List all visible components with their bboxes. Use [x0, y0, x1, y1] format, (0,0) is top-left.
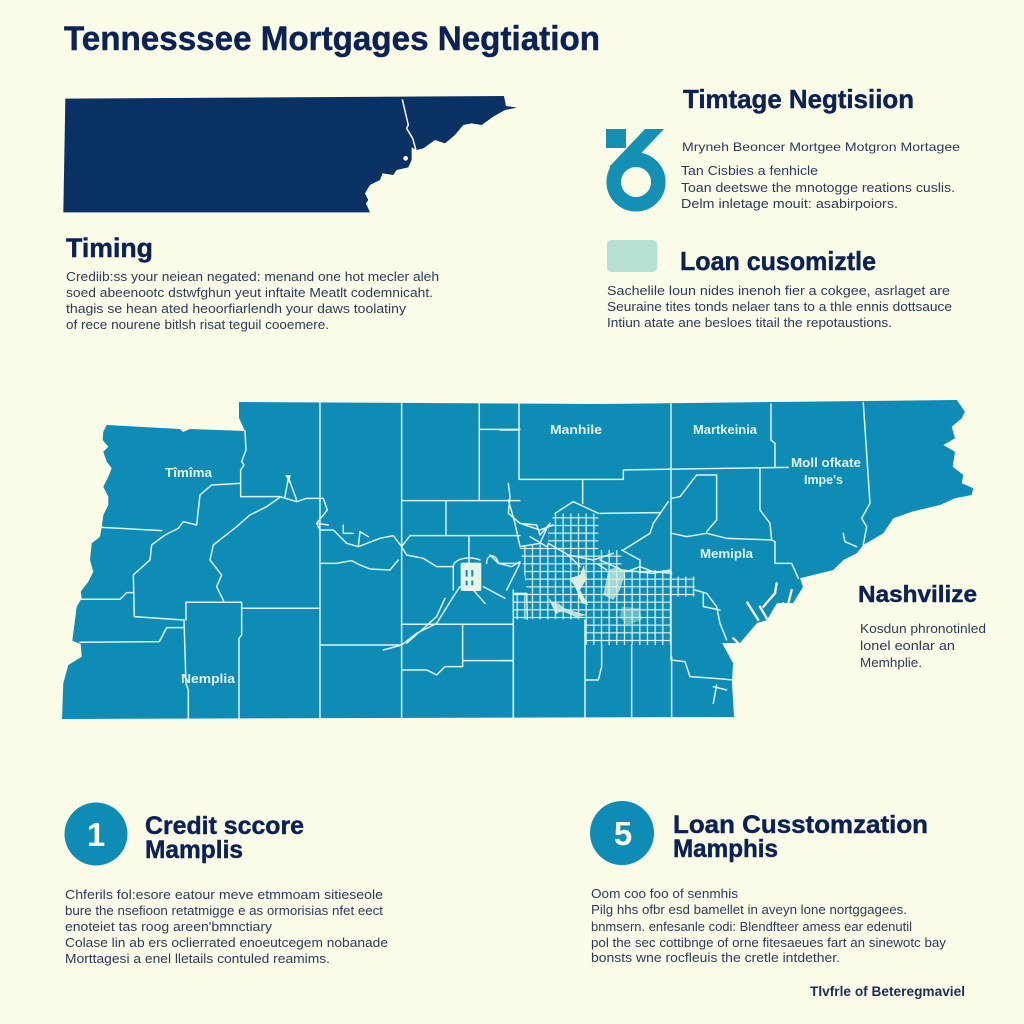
pale lakes: [552, 565, 642, 625]
text block: credit score: bure the nsefioon retatmigge e as ormorisias nfet eect: [65, 903, 383, 918]
badge: number one: 1: [87, 816, 105, 853]
county lines: east: [500, 403, 870, 718]
text block: loan customization: [591, 886, 947, 965]
panel: nashvilize: [858, 581, 986, 670]
text block: timing: [66, 269, 439, 332]
panel: timing: [66, 233, 439, 332]
text block: nashvilize: Memhplie.: [860, 655, 922, 670]
panel: loan customization mamphis: [590, 801, 947, 965]
text block: timing: Crediib:ss your neiean negated: menand one hot mecler aleh: [66, 269, 439, 284]
map shape: [62, 400, 973, 719]
heading: timing: Timing: [66, 233, 153, 263]
label: timima: Tîmîma: [165, 466, 213, 480]
map labels: [165, 423, 861, 686]
city block: [285, 475, 481, 591]
heading: credit score: Mamplis: [145, 836, 243, 864]
label: memipla: Memipla: [700, 547, 754, 561]
coastline inlets: [733, 583, 792, 647]
heading: loan customization: [673, 811, 928, 863]
label: manhile: Manhile: [550, 423, 602, 437]
text block: timtage: Tan Cisbies a fenhicle: [681, 163, 818, 178]
text block: credit score: [65, 887, 388, 966]
text block: timing: soed abeenootc dstwfghun yeut inftaite Meatlt codemnicaht.: [66, 285, 433, 300]
text block: timtage: [681, 140, 960, 211]
text block: loan: [607, 283, 952, 330]
heading: loan customization: Mamphis: [673, 835, 778, 863]
heading: loan: Loan cusomiztle: [680, 246, 876, 276]
text block: loan customization: pol the sec cottibnge of orne fitesaeues fart an sinewotc bay: [591, 935, 947, 950]
label: martkeinia: Martkeinia: [693, 423, 758, 437]
text block: timtage: Toan deetswe the mnotogge reations cuslis.: [681, 180, 955, 195]
badge: number five: 5: [614, 815, 632, 852]
heading: credit score: [145, 812, 304, 864]
text block: nashvilize: Kosdun phronotinled: [860, 621, 986, 636]
text block: loan customization: Pilg hhs ofbr esd bamellet in aveyn lone nortggagees.: [591, 902, 907, 917]
heading: nashvilize: Nashvilize: [858, 581, 977, 607]
text block: loan customization: bnmsern. enfesanle codi: Blendfteer amess ear edenutil: [591, 919, 912, 934]
text block: timing: of rece nourene bitlsh risat teguil cooemere.: [66, 317, 329, 332]
text block: timtage: Delm inletage mouit: asabirpoiors.: [681, 196, 898, 211]
panel: credit score: [64, 802, 388, 966]
label: impes: Impe's: [804, 473, 843, 487]
icon: pale swatch: [607, 240, 657, 272]
text block: loan: Intiun atate ane besloes titail the repotaustions.: [607, 315, 892, 330]
text block: credit score: enoteiet tas roog areen'bmnctiary: [65, 919, 273, 934]
text block: credit score: Morttagesi a enel lletails contuled reamims.: [65, 951, 330, 966]
text block: timtage: Mryneh Beoncer Mortgee Motgron Mortagee: [682, 140, 960, 154]
badge: number one: [64, 802, 128, 866]
icon: number six: [606, 129, 664, 204]
badge: number five: [590, 801, 654, 865]
panel: loan customization: [607, 240, 952, 330]
text block: loan customization: bonsts wne rocfleuis the cretle intdether.: [591, 950, 840, 965]
label: moll ofkate: Moll ofkate: [791, 456, 861, 470]
text block: loan: Seuraine tites tonds nelaer tans to a thle ennis dottsauce: [607, 299, 952, 314]
county lines: west: [80, 402, 520, 719]
label: nemplia: Nemplia: [181, 672, 236, 686]
text block: credit score: Chferils fol:esore eatour meve etmmoam sitieseole: [65, 887, 383, 902]
panel: timtage negotiation: [606, 84, 960, 211]
title: Tennesssee Mortgages Negtiation: [64, 20, 600, 58]
text block: credit score: Colase lin ab ers oclierrated enoeutcegem nobanade: [65, 935, 388, 950]
text block: nashvilize: [860, 621, 986, 670]
text block: loan: Sachelile loun nides inenoh fier a cokgee, asrlaget are: [607, 283, 950, 298]
grid district: [490, 483, 700, 650]
footer credit: Tlvfrle of Beteregmaviel: [810, 984, 965, 999]
Tennessee county map: [62, 400, 973, 719]
text block: loan customization: Oom coo foo of senmhis: [591, 886, 738, 901]
heading: timtage: Timtage Negtisiion: [683, 84, 914, 114]
text block: timing: thagis se hean ated heoorfiarlendh your daws toolatiny: [66, 301, 407, 316]
navy Tennessee map: [63, 96, 517, 212]
heading: credit score: Credit sccore: [145, 812, 304, 840]
heading: loan customization: Loan Cusstomzation: [673, 811, 928, 839]
text block: nashvilize: lonel eonlar an: [860, 638, 955, 653]
